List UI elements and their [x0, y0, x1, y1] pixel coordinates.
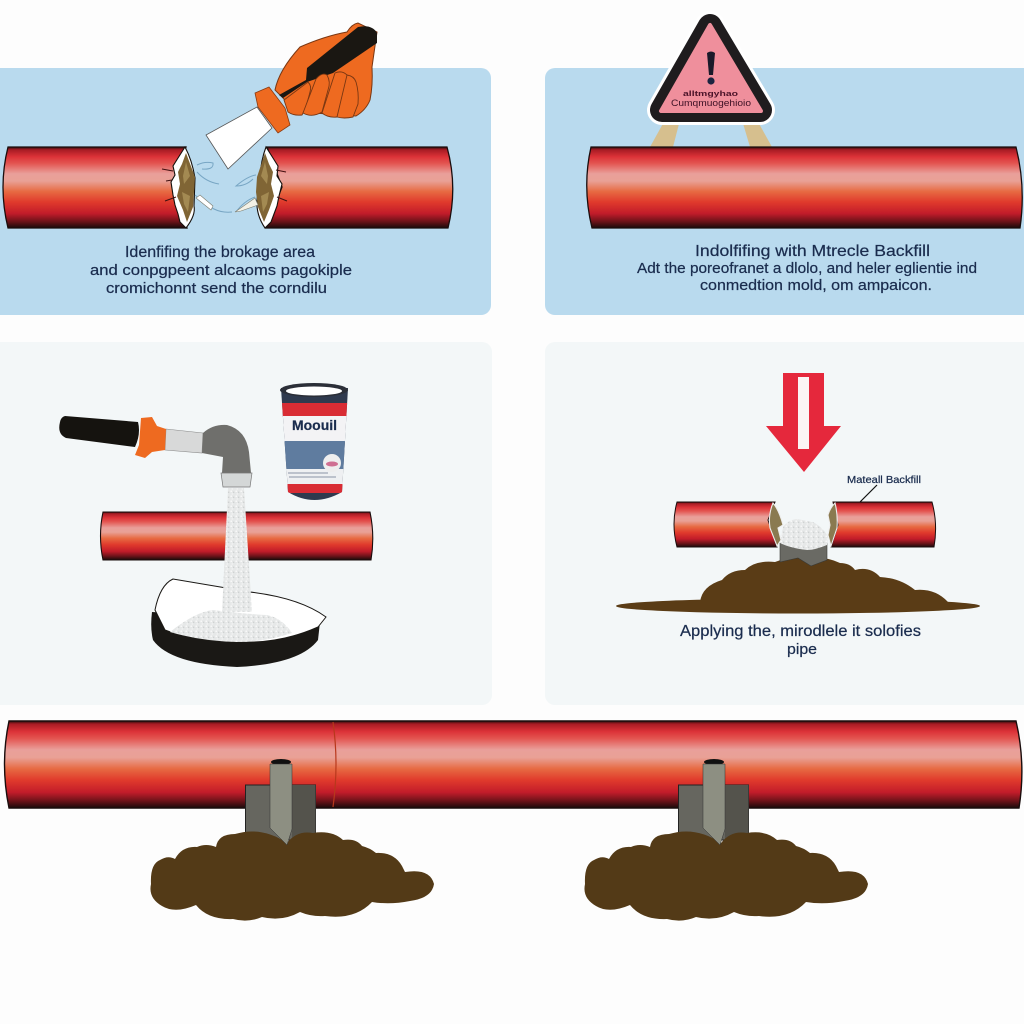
heading: step four: Applying the, mirodlele it solofies — [680, 623, 921, 640]
left pipe break — [162, 147, 232, 228]
text: step two description: Adt the poreofranet a dlolo, and heler eglientie ind — [637, 261, 977, 277]
soil mound — [616, 558, 980, 614]
support block — [780, 543, 827, 566]
left pipe segment — [3, 147, 187, 228]
text: step one description line 3: cromichonnt send the corndilu — [106, 281, 327, 297]
warning sign — [650, 25, 772, 147]
right pipe segment — [831, 502, 936, 547]
right pipe segment — [266, 147, 453, 228]
pipe — [100, 512, 373, 560]
warning sign: alltmgyhao — [683, 89, 739, 98]
heading: step two: Indolfifing with Mtrecle Backfill — [695, 243, 930, 260]
pipe — [587, 147, 1022, 228]
heading: step one: Idenfifing the brokage area — [125, 244, 315, 261]
label: miracle backfill — [847, 475, 921, 502]
left break — [769, 503, 783, 546]
text: step four line 2: pipe — [787, 642, 817, 658]
backfill can — [278, 383, 352, 500]
pouring tool — [59, 416, 252, 487]
support post and mound: left — [150, 759, 434, 921]
right break — [828, 503, 837, 546]
finished long pipe — [4, 721, 1022, 808]
text: step two description line 3: conmedtion mold, om ampaicon. — [700, 278, 932, 294]
icon: gloved hand holding scraper — [206, 23, 377, 169]
mixing pan — [151, 579, 326, 667]
support post and mound: right — [584, 759, 868, 921]
panel: applying the backfill — [545, 342, 1024, 705]
right pipe break — [235, 147, 287, 228]
backfill can: Moouil — [292, 417, 337, 433]
panel: pouring backfill — [0, 342, 492, 705]
panel: identifying the breakage — [0, 23, 491, 315]
panel: indicating with miracle backfill — [545, 25, 1024, 315]
warning sign: Cumqmuogehioio — [671, 98, 751, 108]
arrow: downward — [766, 373, 841, 472]
label: miracle backfill: Mateall Backfill — [847, 475, 921, 486]
text: step one description: and conpgpeent alcaoms pagokiple — [90, 263, 352, 279]
backfill fill — [780, 519, 828, 550]
powder stream — [222, 488, 252, 612]
left pipe segment — [674, 502, 777, 547]
